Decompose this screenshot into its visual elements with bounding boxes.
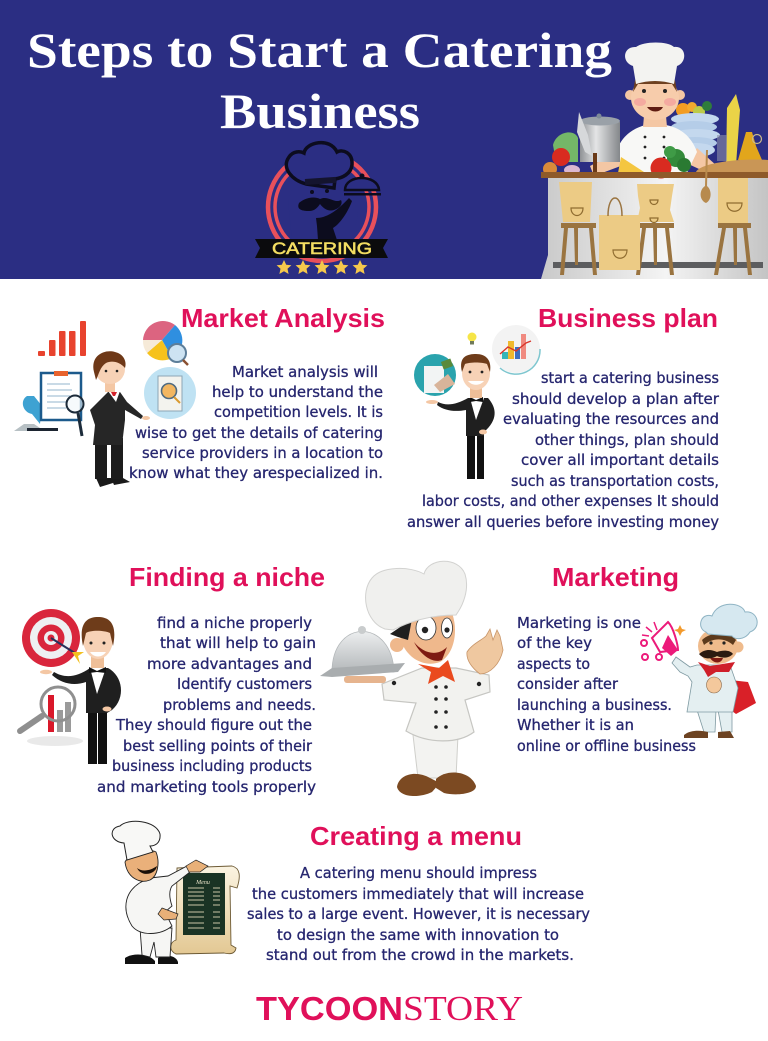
text block: Marketing is one [517,614,641,632]
brand logo: tycoonstory [256,989,523,1028]
text block: A catering menu should impress [300,864,537,882]
text block [407,369,720,531]
text block: best selling points of their [123,737,313,755]
text block: launching a business. [517,696,672,714]
title: Steps to Start a Catering [27,22,612,78]
text block: answer all queries before investing money [407,513,719,531]
text block: They should figure out the [115,716,312,734]
icon: magnifier with bars [20,687,83,746]
heading: Marketing [552,562,679,592]
text block [97,614,316,796]
illustration: menu scroll: Menu [195,880,210,886]
header band [0,0,768,279]
text block: find a niche properly [157,614,312,632]
text block: help to understand the [212,383,383,401]
text block: know what they arespecialized in. [129,464,383,482]
panel: business plan [407,303,720,531]
text block: Identify customers [177,675,312,693]
chef figure [590,42,717,176]
panel: creating a menu [112,821,590,964]
head [390,601,455,664]
illustration: chef pointing at menu [112,821,208,964]
text block: cover all important details [521,451,719,469]
shoes and trousers [397,735,476,796]
text block: to design the same with innovation to [277,926,559,944]
heading: Business plan [538,303,718,333]
text block: other things, plan should [535,431,719,449]
catering logo [255,143,388,274]
text block: that will help to gain [160,634,316,652]
text block: and marketing tools properly [97,778,316,796]
text block: of the key [517,634,592,652]
icon: report in circle [144,367,196,419]
text block: sales to a large event. However, it is necessary [247,905,590,923]
text block [517,614,696,755]
text block: competition levels. It is [214,403,383,421]
panel: marketing [517,562,757,755]
icon: megaphone [641,622,686,660]
kitchen items [541,112,768,203]
heading: Finding a niche [129,562,325,592]
text block [129,363,383,482]
text block: the customers immediately that will increase [252,885,584,903]
illustration: central chef with cloche [320,561,503,796]
text block: Whether it is an [517,716,634,734]
text block: such as transportation costs, [511,472,719,490]
illustration: businessman [426,354,495,479]
text block: labor costs, and other expenses It should [422,492,719,510]
text block: aspects to [517,655,590,673]
icon: target with arrow [22,609,84,667]
ok hand [467,629,503,674]
stools and takeaway bags [559,178,752,275]
counter [541,178,768,279]
icon: pie chart [143,321,188,365]
panel: finding a niche [20,562,325,796]
text block: problems and needs. [163,696,316,714]
illustration: chef with cape [672,604,757,738]
brand logo: tycoonstory: TYCOON [256,990,403,1027]
icon: clipboard and microscope [14,371,84,436]
icon: light bulb [468,332,476,344]
heading: Market Analysis [181,303,385,333]
icon: bar chart [38,321,86,356]
text block: Market analysis will [232,363,378,381]
plates and pasta behind the chef [671,94,762,165]
text block: evaluating the resources and [503,410,719,428]
brand logo: tycoonstory: STORY [403,989,523,1028]
text block: consider after [517,675,619,693]
illustration: businessman [90,351,150,487]
panel: market analysis [14,303,385,487]
text block: stand out from the crowd in the markets. [266,946,574,964]
toque hat [366,561,467,630]
title: Business [220,83,420,139]
title [27,22,612,139]
text block [247,864,590,964]
text block: start a catering business [541,369,719,387]
illustration: chef at catering counter [541,42,768,279]
text block: wise to get the details of catering [135,424,383,442]
illustration: businessman [40,617,121,764]
text block: service providers in a location to [142,444,383,462]
text block: business including products [112,757,312,775]
jacket [382,660,490,741]
cloche [320,626,405,683]
text block: should develop a plan after [512,390,720,408]
heading: Creating a menu [310,821,522,851]
text block: more advantages and [147,655,312,673]
icon: chart speech bubble [492,325,540,374]
catering logo: CATERING [272,239,372,258]
text block: online or offline business [517,737,696,755]
illustration: menu scroll [171,866,239,954]
icon: budget document circle [414,354,456,396]
